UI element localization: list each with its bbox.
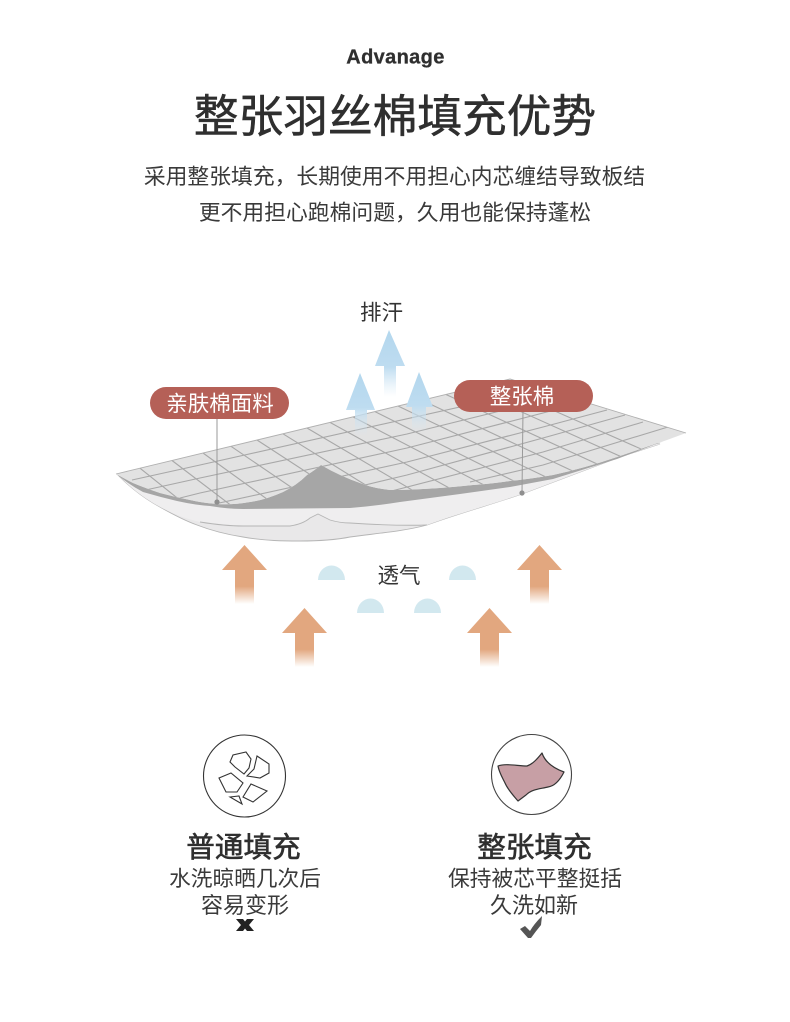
text block: 普通填充: 普通填充: [186, 832, 301, 864]
icon: cross mark: [236, 919, 254, 931]
text block: 整张填充: 久洗如新: [490, 893, 578, 918]
text block: description: 更不用担心跑棉问题，久用也能保持蓬松: [199, 200, 591, 225]
text block: 普通填充: [169, 832, 321, 918]
text block: description: 采用整张填充，长期使用不用担心内芯缠结导致板结: [144, 164, 645, 189]
arrows: moisture wicking: [346, 330, 433, 436]
callout: 整张棉: 整张棉: [490, 385, 554, 409]
callout: 整张棉: [454, 380, 593, 496]
heading: 整张羽丝棉填充优势: [194, 93, 596, 142]
layer: body underside: [117, 444, 660, 541]
label: 透气: 透气: [377, 564, 421, 588]
diagram: quilt layers: [116, 378, 686, 542]
layer: body upper fold: [120, 444, 660, 526]
text block: 普通填充: 容易变形: [201, 893, 289, 918]
label: 排汗: 排汗: [360, 301, 403, 325]
layer: dark fill flap: [117, 441, 664, 509]
arrows: warm air rising: [222, 545, 562, 667]
outline: sheet edge: [116, 379, 686, 474]
text block: 整张填充: 整张填充: [477, 832, 592, 864]
text block: 整张填充: [448, 832, 622, 918]
callout: 亲肤棉面料: [150, 387, 289, 505]
icons: air bubbles: [318, 566, 476, 613]
icon: broken filling: [204, 735, 286, 817]
text block: 普通填充: 水洗晾晒几次后: [169, 866, 321, 891]
text block: 整张填充: 保持被芯平整挺括: [448, 866, 622, 891]
layer: quilted top sheet: [116, 380, 686, 504]
title: Advanage: Advanage: [346, 46, 445, 68]
icon: whole sheet filling: [492, 734, 572, 814]
layer: inner seam: [200, 514, 427, 526]
icon: check mark: [520, 916, 542, 938]
callout: 亲肤棉面料: 亲肤棉面料: [166, 392, 274, 416]
text block: description: [144, 164, 645, 225]
